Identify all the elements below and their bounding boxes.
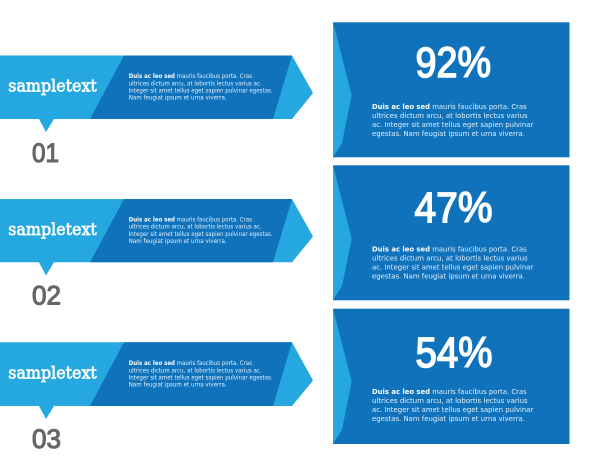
panel 2 text: Duis ac leo sed mauris faucibus porta. Cras: [372, 244, 527, 254]
banner 1 text: Nam feugiat ipsum et urna viverra.: [129, 95, 227, 102]
panel 1 value: 92%: [416, 40, 491, 87]
panel 3 text: ultrices dictum arcu, at lobortis lectus varius: [372, 396, 528, 405]
banner 2 text: Duis ac leo sed mauris faucibus porta. Cras: [129, 216, 252, 223]
banner 3 text: Nam feugiat ipsum et urna viverra.: [129, 382, 227, 389]
banner 2 text: Integer sit amet tellus eget sapien pulvinar egestas.: [129, 231, 273, 238]
panel 1 text: ultrices dictum arcu, at lobortis lectus varius: [372, 111, 528, 120]
panel 1: [333, 22, 570, 157]
banner 3 heading: sampletext: [8, 363, 97, 383]
number 01: 01: [32, 138, 59, 168]
panel 3 text: [372, 387, 534, 423]
panel 2 text: ultrices dictum arcu, at lobortis lectus varius: [372, 254, 528, 263]
banner 3 text: ultrices dictum arcu, at lobortis lectus varius ac.: [129, 367, 262, 374]
banner 2 text: [129, 216, 273, 245]
banner 1 text: Integer sit amet tellus eget sapien pulvinar egestas.: [129, 88, 273, 94]
banner 3 text: Duis ac leo sed mauris faucibus porta. Cras: [129, 360, 252, 367]
banner 2 text: Nam feugiat ipsum et urna viverra.: [129, 238, 227, 245]
banner 1: [0, 56, 313, 132]
panel 1 text: ac. Integer sit amet tellus eget sapien pulvinar: [372, 120, 534, 129]
panel 2: [333, 165, 570, 300]
number 03: 03: [32, 424, 61, 454]
banner 2: [0, 199, 313, 276]
banner 3 text: Integer sit amet tellus eget sapien pulvinar egestas.: [129, 374, 273, 382]
panel 3 text: egestas. Nam feugiat ipsum et urna viverra.: [372, 414, 525, 423]
number 02: 02: [32, 281, 61, 311]
panel 1 text: Duis ac leo sed mauris faucibus porta. Cras: [372, 102, 527, 111]
panel 3 text: Duis ac leo sed mauris faucibus porta. Cras: [372, 387, 527, 396]
panel 2 text: ac. Integer sit amet tellus eget sapien pulvinar: [372, 263, 534, 272]
panel 2 text: egestas. Nam feugiat ipsum et urna viverra.: [372, 272, 525, 281]
banner 1 text: [129, 73, 273, 102]
banner 2 heading: sampletext: [8, 220, 97, 240]
banner 1 text: ultrices dictum arcu, at lobortis lectus varius ac.: [129, 80, 262, 87]
banner 1 heading: sampletext: [8, 76, 97, 96]
banner 2 text: ultrices dictum arcu, at lobortis lectus varius ac.: [129, 224, 262, 231]
banner 3: [0, 342, 313, 419]
panel 2 text: [372, 244, 534, 281]
panel 1 text: egestas. Nam feugiat ipsum et urna viverra.: [372, 129, 525, 138]
panel 2 value: 47%: [414, 185, 492, 232]
panel 3: [333, 309, 570, 444]
panel 3 value: 54%: [416, 330, 492, 377]
panel 1 text: [372, 102, 534, 138]
banner 1 text: Duis ac leo sed mauris faucibus porta. Cras: [129, 73, 252, 80]
panel 3 text: ac. Integer sit amet tellus eget sapien pulvinar: [372, 405, 534, 414]
banner 3 text: [129, 360, 273, 389]
